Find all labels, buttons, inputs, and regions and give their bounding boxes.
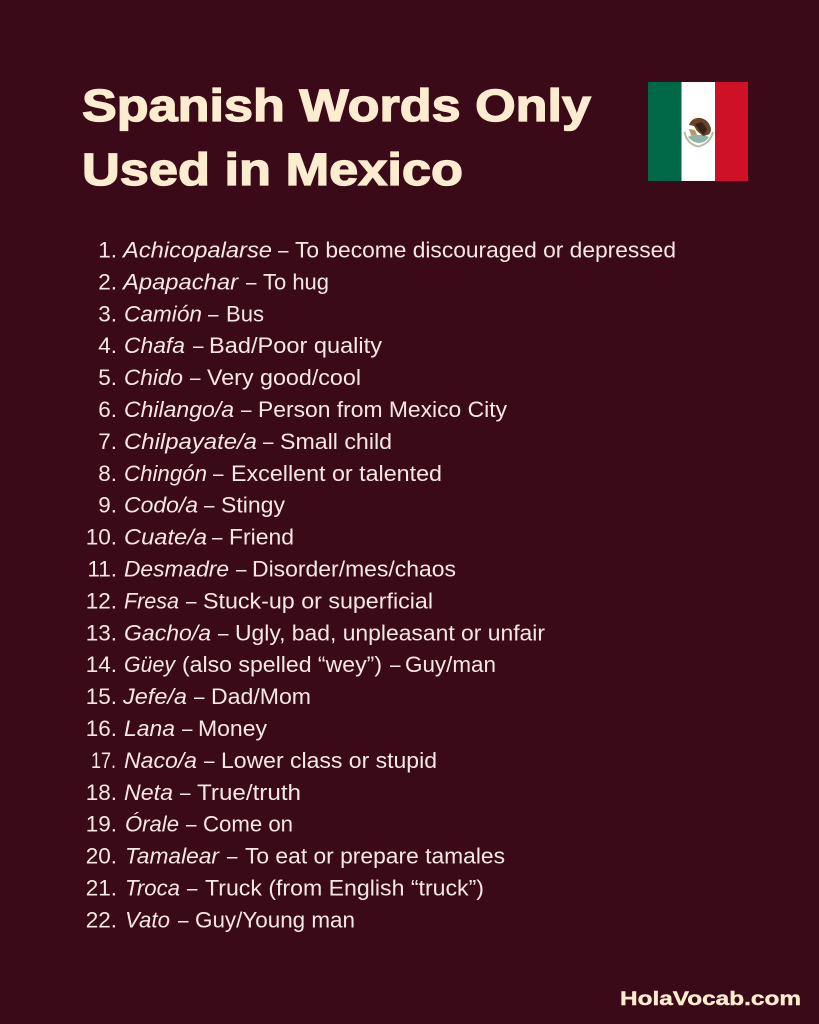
list item 11: Desmadre [124,556,229,582]
list item 3: – [208,301,219,326]
list item 9: Stingy [221,493,286,518]
list item 21: – [187,876,198,900]
list item 12: Stuck-up or superficial [203,588,433,613]
list item 13: 13. [86,620,117,645]
list item 13 [86,620,546,645]
list item 19: 19. [86,812,117,837]
list item 11 [87,556,456,582]
list item 9: Codo/a [124,493,198,518]
list item 14: (also spelled “wey”) [182,652,382,677]
list item 18: Neta [124,780,173,805]
list item 17: – [204,748,215,773]
list item 3 [98,301,264,326]
list item 22 [86,907,355,932]
list item 8: Chingón [124,461,207,486]
list item 22: Guy/Young man [195,907,355,932]
list item 18: True/truth [197,780,301,805]
list item 21: Truck (from English “truck”) [205,876,484,900]
list item 18: – [180,780,191,805]
list item 19: – [186,812,197,837]
list item 16: – [182,716,193,741]
list item 10 [86,525,294,550]
list item 9: 9. [98,493,117,518]
list item 11: 11. [87,556,117,582]
list item 9: – [204,493,215,518]
list item 20: To eat or prepare tamales [245,844,505,869]
footer brand: HolaVocab.com [620,988,801,1010]
list item 22: 22. [86,907,117,932]
list item 4: 4. [98,333,117,358]
list item 10: – [212,525,223,550]
list item 20: – [227,844,238,869]
list item 15 [86,684,311,709]
list item 16 [86,716,268,741]
list item 16: Money [198,716,268,741]
list item 21 [86,876,484,900]
list item 22: Vato [125,907,170,932]
list item 6: – [241,397,252,422]
list item 17: Naco/a [124,748,197,773]
list item 2: To hug [263,269,329,294]
icon: Mexican flag [648,82,748,181]
list item 13: Gacho/a [124,620,211,645]
list item 15: Jefe/a [122,684,187,709]
list item 14: 14. [86,652,117,677]
list item 1: To become discouraged or depressed [295,238,676,262]
list item 7: Small child [280,429,392,454]
list item 12 [86,588,433,613]
list item 21: Troca [125,876,180,900]
list item 6: Person from Mexico City [258,397,508,422]
list item 1: – [278,238,289,262]
list item 20: 20. [86,844,117,869]
list item 6 [98,397,508,422]
list item 11: Disorder/mes/chaos [252,556,456,582]
list item 13: Ugly, bad, unpleasant or unfair [235,620,546,645]
list item 15: – [194,684,205,709]
list item 8 [98,461,442,486]
list item 12: Fresa [124,588,179,613]
title: Used in Mexico [82,144,463,195]
list item 4: – [193,333,204,358]
list item 8: Excellent or talented [231,461,442,486]
list item 10: Cuate/a [124,525,207,550]
list item 1 [98,238,676,262]
list item 7: Chilpayate/a [124,429,257,454]
list item 14: – [390,652,401,677]
word list [86,238,676,932]
list item 2 [98,269,329,294]
list item 17: 17. [91,748,116,773]
list item 22: – [178,907,189,932]
list item 6: 6. [98,397,117,422]
list item 10: Friend [229,525,294,550]
list item 8: 8. [98,461,117,486]
list item 20: Tamalear [125,844,221,869]
list item 12: – [186,588,197,613]
list item 2: 2. [98,269,117,294]
list item 7: – [263,429,274,454]
list item 2: Apapachar [121,269,240,294]
list item 15: 15. [86,684,117,709]
list item 16: 16. [86,716,117,741]
list item 5: 5. [98,365,117,390]
list item 14: Güey [124,652,177,677]
list item 13: – [218,620,229,645]
list item 19: Órale [125,812,179,837]
list item 12: 12. [86,588,117,613]
list item 16: Lana [124,716,175,741]
list item 3: Camión [124,301,202,326]
list item 3: Bus [226,301,264,326]
list item 4: Bad/Poor quality [209,333,383,358]
list item 17: Lower class or stupid [221,748,437,773]
title: Spanish Words Only [82,80,591,131]
list item 11: – [236,556,247,582]
list item 1: 1. [98,238,117,262]
list item 1: Achicopalarse [121,238,272,262]
list item 2: – [246,269,257,294]
list item 14 [86,652,496,677]
list item 7 [98,429,392,454]
list item 18 [86,780,301,805]
list item 8: – [213,461,224,486]
list item 9 [98,493,286,518]
list item 18: 18. [86,780,117,805]
list item 5: – [190,365,201,390]
list item 5 [98,365,361,390]
list item 21: 21. [86,876,117,900]
list item 17 [91,748,437,773]
list item 15: Dad/Mom [211,684,311,709]
list item 5: Very good/cool [207,365,361,390]
title [82,80,591,195]
list item 20 [86,844,505,869]
list item 7: 7. [98,429,117,454]
list item 10: 10. [86,525,117,550]
list item 14: Guy/man [405,652,496,677]
list item 19 [86,812,293,837]
list item 4 [98,333,383,358]
list item 3: 3. [98,301,117,326]
list item 6: Chilango/a [124,397,234,422]
list item 5: Chido [124,365,183,390]
list item 4: Chafa [124,333,185,358]
list item 19: Come on [203,812,293,837]
